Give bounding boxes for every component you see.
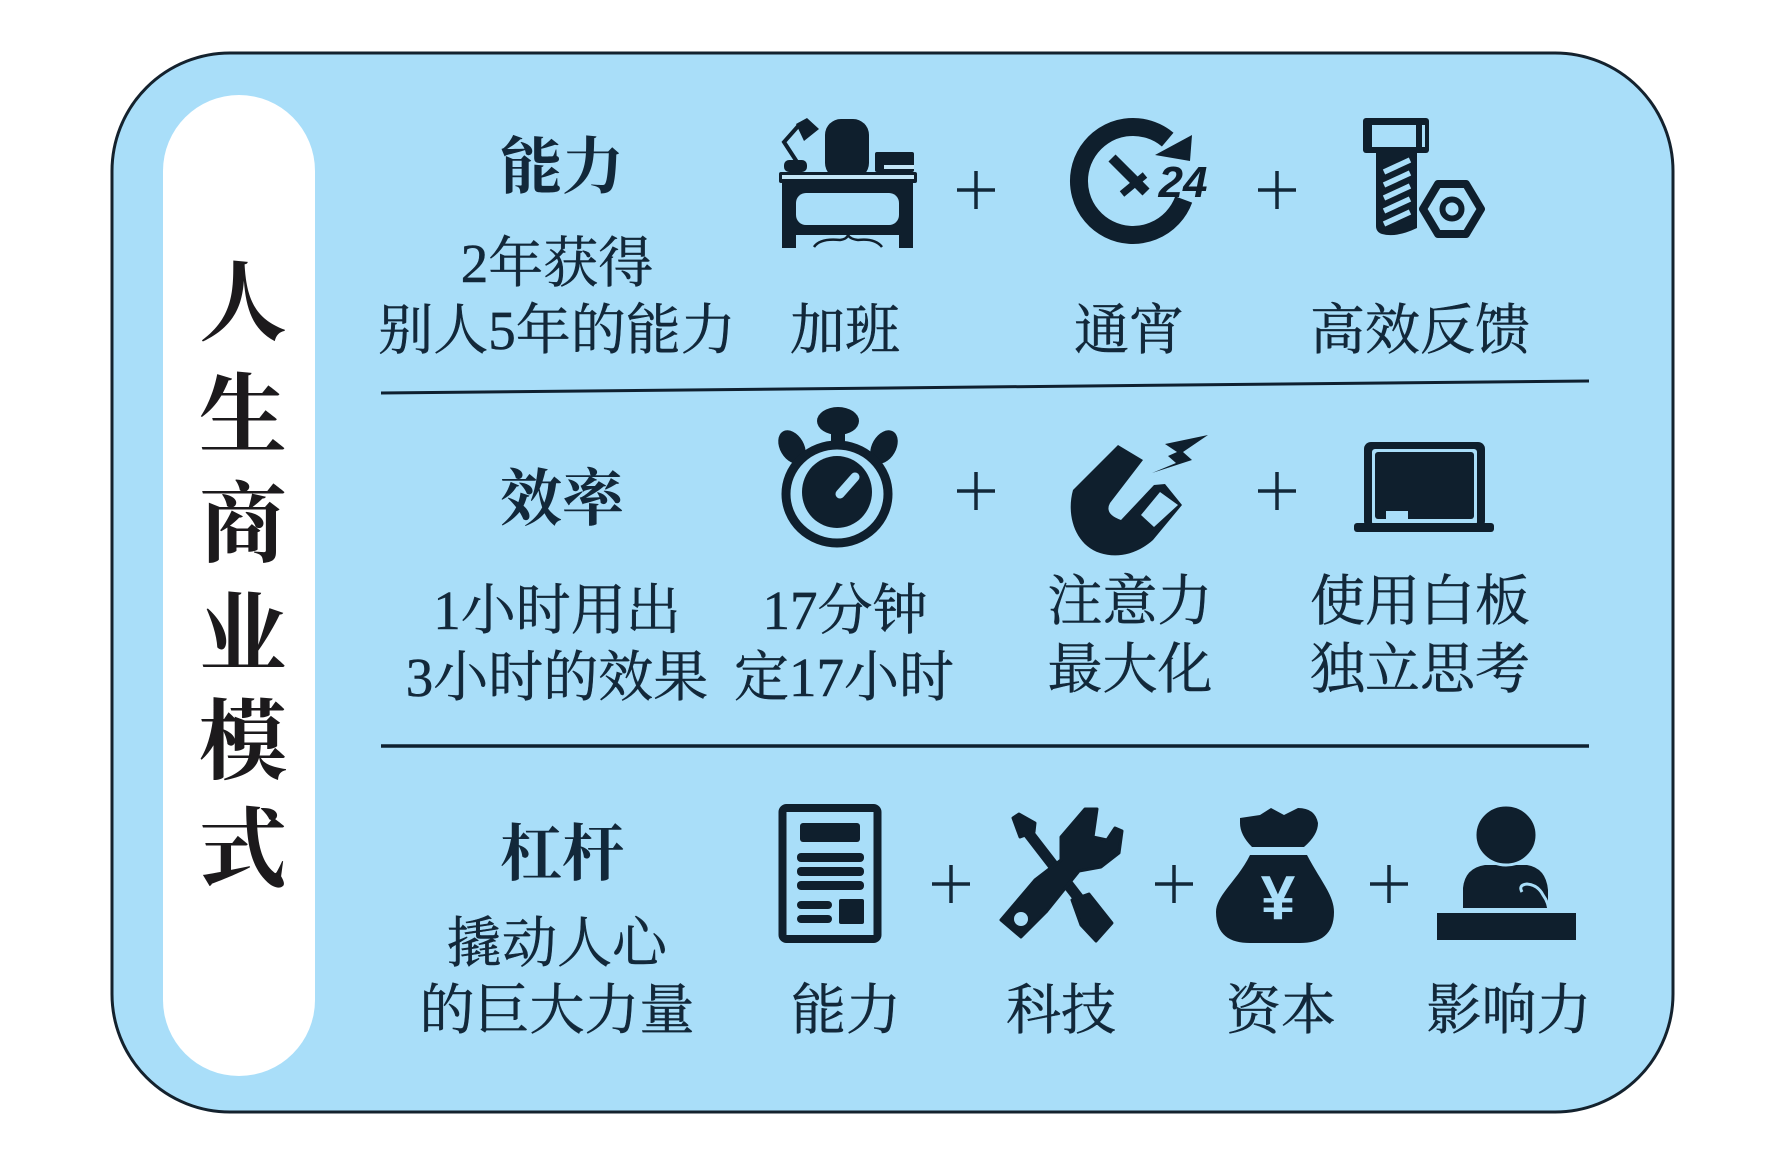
text block: maximise attention xyxy=(1047,571,1213,700)
icon: money bag: ¥ xyxy=(1261,864,1296,933)
label: efficient feedback: 高效反馈 xyxy=(1310,300,1530,361)
icon: whiteboard xyxy=(1354,442,1494,532)
heading: efficiency: 效率 xyxy=(500,466,625,534)
text block: maximise attention: 最大化 xyxy=(1047,639,1213,700)
icon: bolt and nut xyxy=(1363,118,1481,235)
text block: whiteboard thinking xyxy=(1310,571,1530,700)
text block: maximise attention: 注意力 xyxy=(1047,571,1213,632)
label: overtime: 加班 xyxy=(790,300,900,361)
text block: efficiency description: 3小时的效果 xyxy=(406,647,708,708)
icon: desk xyxy=(779,118,917,248)
title: vertical heading: 模 xyxy=(199,695,287,792)
label: ability: 能力 xyxy=(791,980,901,1041)
title: vertical heading xyxy=(199,257,287,900)
title: vertical heading: 人 xyxy=(199,257,287,354)
text block: ability description xyxy=(378,233,736,361)
plus xyxy=(932,865,970,903)
panel: blue rounded background xyxy=(112,53,1673,1112)
plus xyxy=(1258,472,1296,510)
label: technology: 科技 xyxy=(1006,980,1116,1041)
icon: 24-hour clock: 24 xyxy=(1158,158,1207,207)
title: vertical heading: 生 xyxy=(199,369,287,466)
text block: 17 minutes: 17分钟 xyxy=(762,580,928,641)
plus xyxy=(1258,171,1296,209)
heading: leverage: 杠杆 xyxy=(500,821,624,889)
icon: 24-hour clock xyxy=(1079,127,1207,235)
text block: efficiency description: 1小时用出 xyxy=(433,580,681,641)
title: vertical heading: 式 xyxy=(199,803,287,900)
text block: whiteboard thinking: 使用白板 xyxy=(1310,571,1530,632)
icon: stopwatch xyxy=(773,407,903,543)
label: all-nighter: 通宵 xyxy=(1074,300,1184,361)
text block: 17 minutes xyxy=(734,580,954,708)
text block: ability description: 别人5年的能力 xyxy=(378,300,736,361)
plus xyxy=(1155,865,1193,903)
icon: magnet xyxy=(1071,435,1208,555)
plus xyxy=(957,472,995,510)
text block: leverage description: 撬动人心 xyxy=(447,913,669,974)
icon: document xyxy=(782,808,878,939)
text block: leverage description xyxy=(419,913,695,1041)
icon: speaker at podium xyxy=(1437,805,1576,940)
label: influence: 影响力 xyxy=(1426,980,1592,1041)
plus xyxy=(1370,865,1408,903)
text block: whiteboard thinking: 独立思考 xyxy=(1310,639,1530,700)
row: leverage xyxy=(419,805,1592,1041)
title: vertical heading: 商 xyxy=(199,478,287,575)
row: ability xyxy=(378,118,1530,361)
text block: ability description: 2年获得 xyxy=(461,233,653,294)
label: capital: 资本 xyxy=(1226,980,1336,1041)
text block: leverage description: 的巨大力量 xyxy=(419,980,695,1041)
heading: ability: 能力 xyxy=(500,134,624,202)
text block: efficiency description xyxy=(406,580,708,708)
icon: wrench and screwdriver xyxy=(1001,809,1122,941)
plus xyxy=(957,171,995,209)
icon: money bag xyxy=(1216,808,1334,943)
text block: 17 minutes: 定17小时 xyxy=(734,647,954,708)
row: efficiency xyxy=(406,407,1530,708)
title: vertical heading: 业 xyxy=(199,588,287,685)
panel: white title pill xyxy=(163,95,315,1076)
